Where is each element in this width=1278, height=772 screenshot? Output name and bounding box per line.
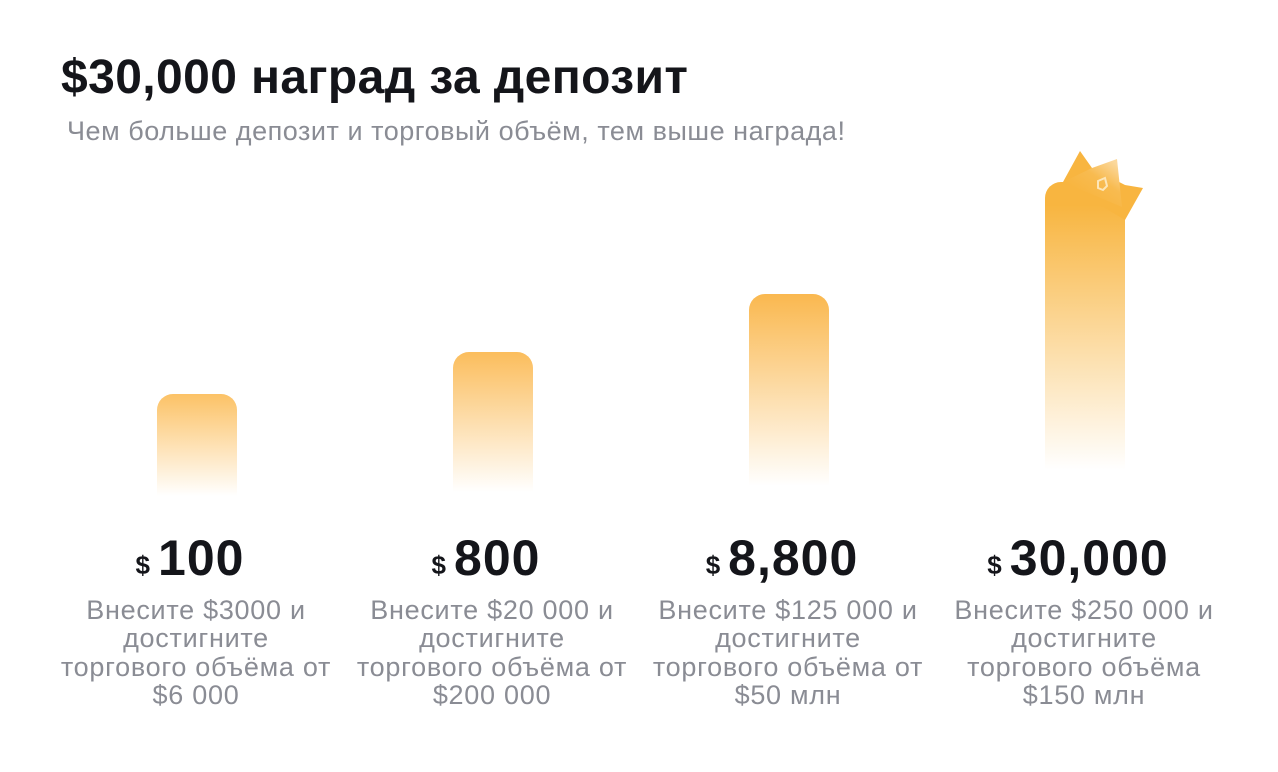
requirement text: Внесите $250 000 и (954, 595, 1214, 625)
requirement text: $200 000 (433, 680, 551, 710)
requirement text (954, 595, 1214, 710)
reward column: $800 (357, 530, 627, 710)
requirement text: достигните (123, 623, 269, 653)
bar: $800 (453, 352, 533, 492)
amount: $800 (432, 530, 540, 586)
reward column: $100 (61, 530, 331, 710)
subtitle: Чем больше депозит и торговый объём, тем выше награда! (67, 116, 846, 146)
requirement text: $150 млн (1023, 680, 1145, 710)
requirement text (61, 595, 331, 710)
requirement text: Внесите $125 000 и (658, 595, 918, 625)
requirement text: Внесите $3000 и (86, 595, 306, 625)
amount: $8,800 (706, 530, 858, 586)
icon: crown on top bar (1063, 151, 1143, 220)
amount: $100 (136, 530, 244, 586)
requirement text: достигните (419, 623, 565, 653)
requirement text: торгового объёма от (61, 652, 331, 682)
requirement text: Внесите $20 000 и (370, 595, 614, 625)
requirement text: торгового объёма от (357, 652, 627, 682)
requirement text: $50 млн (735, 680, 841, 710)
reward column: $8,800 (653, 530, 923, 710)
amount: $30,000 (987, 530, 1169, 586)
requirement text: $6 000 (153, 680, 239, 710)
requirement text (357, 595, 627, 710)
requirement text: торгового объёма (967, 652, 1201, 682)
reward column: $30,000 (954, 530, 1214, 710)
requirement text: достигните (715, 623, 861, 653)
title: $30,000 наград за депозит (61, 51, 688, 104)
requirement text (653, 595, 923, 710)
bar: $30,000 (1045, 182, 1125, 470)
requirement text: торгового объёма от (653, 652, 923, 682)
bar: $8,800 (749, 294, 829, 486)
requirement text: достигните (1011, 623, 1157, 653)
bar: $100 (157, 394, 237, 496)
